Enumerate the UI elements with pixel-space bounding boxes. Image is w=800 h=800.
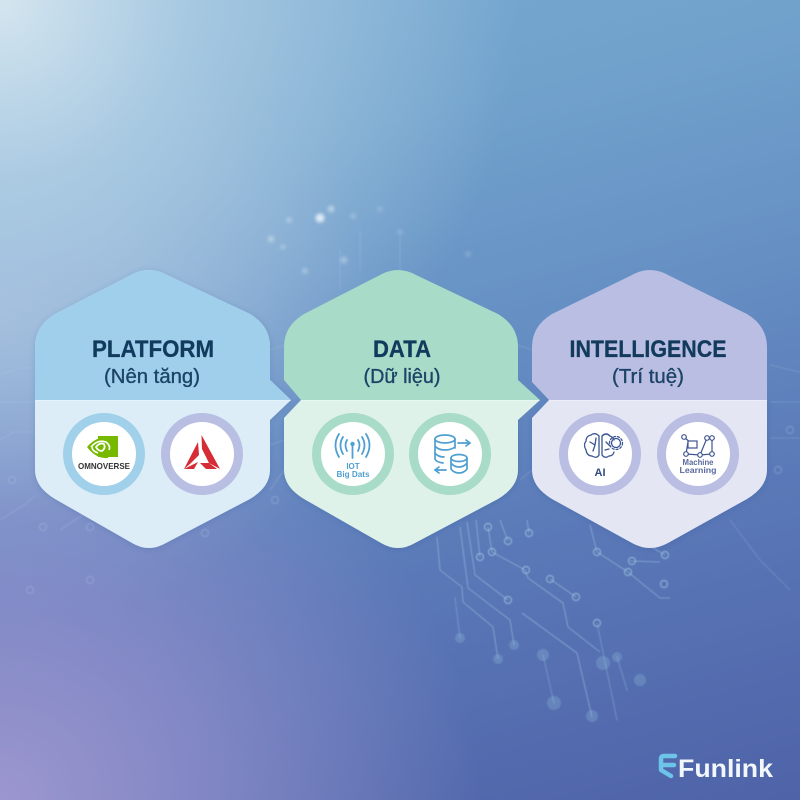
icon: IoT Big Data: Big Dats xyxy=(336,470,370,479)
icon: Funlink mark xyxy=(661,756,675,776)
intelligence subtitle: (Trí tuệ) xyxy=(612,366,684,388)
icon: IoT Big Data xyxy=(316,418,390,490)
data hexagon top band xyxy=(284,270,540,400)
icon: AI brain: AI xyxy=(594,467,606,479)
panel: platform xyxy=(35,270,291,548)
icon: database sync xyxy=(414,418,486,490)
platform hexagon top band xyxy=(35,270,291,400)
logo: Funlink xyxy=(661,755,773,783)
panel: data xyxy=(284,270,540,548)
data title: DATA xyxy=(373,336,431,363)
icon: machine learning xyxy=(662,418,734,490)
platform hexagon body xyxy=(35,270,291,548)
icon: Omniverse logo xyxy=(68,418,140,490)
intelligence title: INTELLIGENCE xyxy=(570,336,726,363)
circuit board background pattern xyxy=(0,230,800,722)
icon: AI brain xyxy=(564,418,636,490)
icon: red triangle logo xyxy=(166,418,238,490)
data hexagon body xyxy=(284,400,518,548)
intelligence hexagon body xyxy=(532,400,767,548)
band separators xyxy=(35,400,767,402)
intelligence hexagon top band xyxy=(532,270,767,400)
platform subtitle: (Nên tăng) xyxy=(104,366,200,388)
icon: machine learning: Machine xyxy=(682,458,714,467)
wordmark: Funlink xyxy=(678,755,773,783)
data arrow tip xyxy=(518,400,540,420)
glowing particles xyxy=(268,206,471,274)
platform title: PLATFORM xyxy=(92,336,214,363)
panel: intelligence xyxy=(532,270,767,548)
icon: Omniverse logo: OMNOVERSE xyxy=(78,461,130,471)
data subtitle: (Dữ liệu) xyxy=(364,366,440,388)
icon: machine learning: Learning xyxy=(680,466,717,475)
icon: IoT Big Data: IOT xyxy=(346,462,360,471)
